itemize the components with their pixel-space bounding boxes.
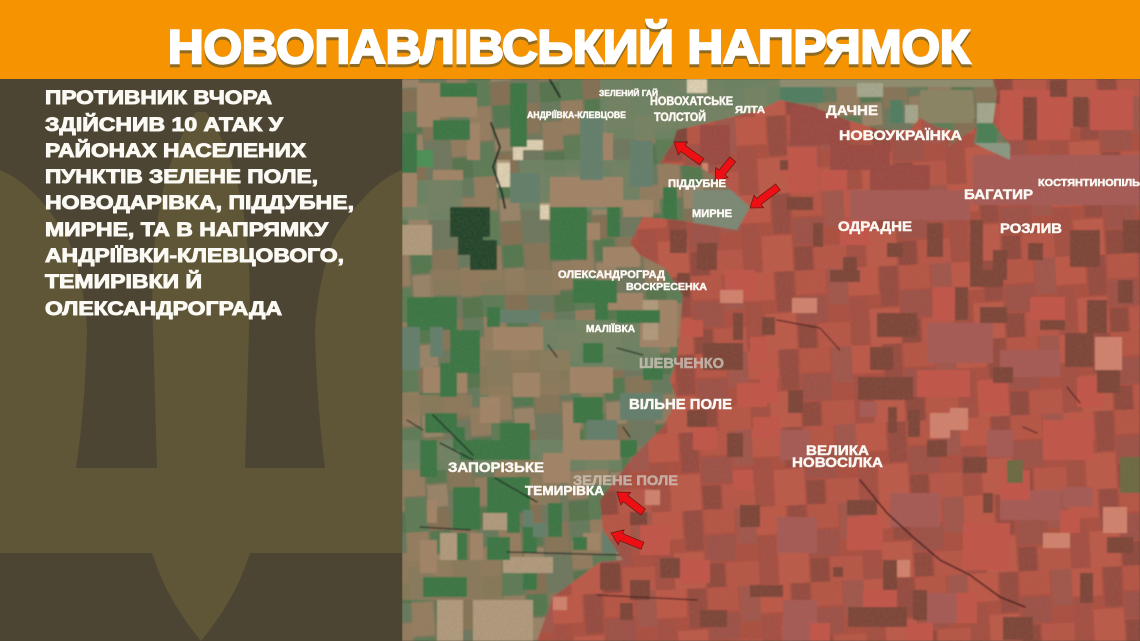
text block: attack summary: РАЙОНАХ НАСЕЛЕНИХ xyxy=(45,138,306,162)
map labels: settlements: БАГАТИР xyxy=(964,186,1033,202)
left panel background xyxy=(0,79,402,641)
text block: attack summary xyxy=(45,87,354,320)
map labels: settlements: ВОСКРЕСЕНКА xyxy=(626,281,707,293)
map labels: settlements: ПІДДУБНЕ xyxy=(668,178,726,190)
map labels: settlements: НОВОХАТСЬКЕ xyxy=(650,96,733,108)
title banner xyxy=(0,0,1140,79)
map labels: settlements: ОДРАДНЕ xyxy=(838,218,912,234)
arrow: near Мирне xyxy=(745,181,783,214)
text block: attack summary: ПУНКТІВ ЗЕЛЕНЕ ПОЛЕ, xyxy=(45,166,318,188)
text block: attack summary: ПРОТИВНИК ВЧОРА xyxy=(45,87,272,109)
text block: attack summary: МИРНЕ, ТА В НАПРЯМКУ xyxy=(45,219,329,241)
text block: attack summary: ТЕМИРІВКИ Й xyxy=(45,269,202,293)
map labels: settlements: ДАЧНЕ xyxy=(826,102,878,118)
gullies in occupied territory xyxy=(597,320,1080,607)
map labels: settlements: РОЗЛИВ xyxy=(1000,220,1062,236)
map labels: settlements: ЗАПОРІЗЬКЕ xyxy=(448,459,544,475)
map labels: settlements: НОВОУКРАЇНКА xyxy=(839,127,962,143)
arrows: attack directions xyxy=(608,135,783,553)
map labels: settlements: ТЕМИРІВКА xyxy=(525,484,604,498)
title: НОВОПАВЛІВСЬКИЙ НАПРЯМОК xyxy=(168,20,970,73)
map labels: settlements: МИРНЕ xyxy=(692,208,732,220)
map labels: settlements: МАЛІЇВКА xyxy=(586,322,635,335)
satellite map xyxy=(402,79,1140,641)
map labels: settlements xyxy=(448,87,1140,498)
map texture xyxy=(402,79,1140,641)
arrow: near Толстой xyxy=(669,135,706,168)
occupied territory overlay xyxy=(537,79,1140,641)
icon: trident emblem xyxy=(0,112,402,641)
river network xyxy=(407,80,643,555)
arrow: near Зелене Поле xyxy=(612,486,648,518)
text block: attack summary: АНДРІЇВКИ-КЛЕВЦОВОГО, xyxy=(45,244,344,267)
map labels: settlements: ОЛЕКСАНДРОГРАД xyxy=(558,269,665,281)
map labels: settlements: ЗЕЛЕНЕ ПОЛЕ xyxy=(573,472,678,488)
map labels: settlements: ЗЕЛЕНИЙ ГАЙ xyxy=(599,87,658,98)
text block: attack summary: НОВОДАРІВКА, ПІДДУБНЕ, xyxy=(45,192,354,214)
map labels: settlements: КОСТЯНТИНОПІЛЬ xyxy=(1038,178,1140,189)
map labels: settlements: НОВОСІЛКА xyxy=(792,454,883,470)
map labels: settlements: ТОЛСТОЙ xyxy=(654,111,706,124)
arrow: south of Зелене Поле xyxy=(608,526,646,553)
map labels: settlements: ЯЛТА xyxy=(735,104,765,116)
text block: attack summary: ОЛЕКСАНДРОГРАДА xyxy=(45,298,282,320)
text block: attack summary: ЗДІЙСНИВ 10 АТАК У xyxy=(45,112,284,136)
map labels: settlements: АНДРІЇВКА-КЛЕВЦОВЕ xyxy=(527,110,626,120)
map labels: settlements: ВЕЛИКА xyxy=(806,442,869,458)
arrow: near Піддубне xyxy=(709,154,739,186)
map labels: settlements: ШЕВЧЕНКО xyxy=(639,356,724,372)
map labels: settlements: ВІЛЬНЕ ПОЛЕ xyxy=(629,397,732,413)
